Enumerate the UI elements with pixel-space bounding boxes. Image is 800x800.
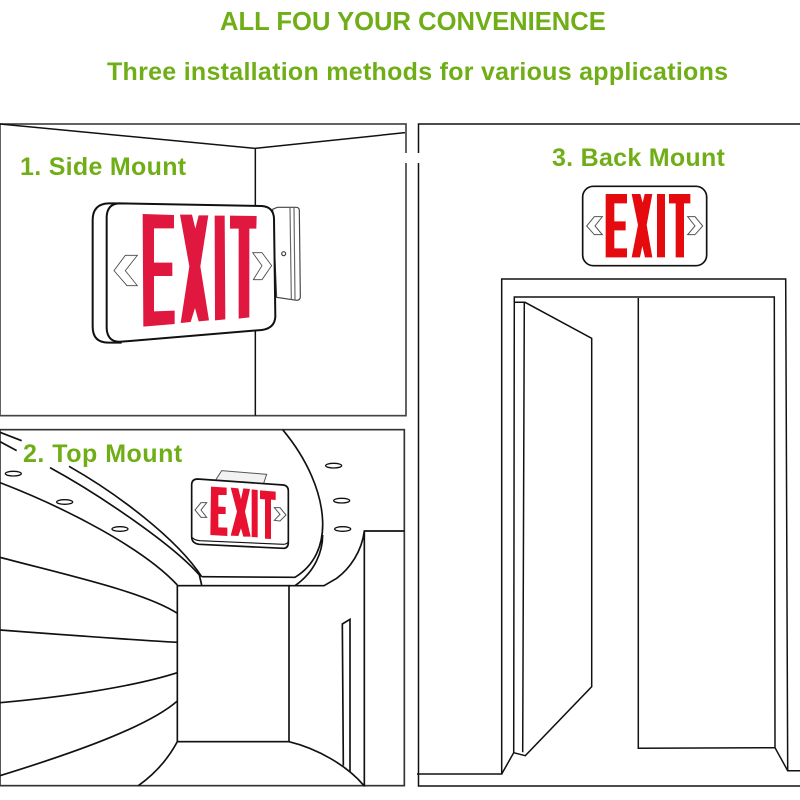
arrows side mount bbox=[114, 253, 272, 286]
sign: back mount bbox=[583, 186, 707, 266]
room corner lines bbox=[0, 124, 406, 416]
EXIT letters side mount bbox=[143, 214, 257, 327]
image seams bbox=[404, 153, 421, 163]
subtitle: Three installation methods for various applications bbox=[107, 58, 728, 86]
sign: top mount bbox=[192, 471, 288, 548]
wall bracket bbox=[273, 207, 300, 300]
sign housing side mount bbox=[93, 203, 122, 343]
title: ALL FOU YOUR CONVENIENCE bbox=[220, 8, 606, 36]
EXIT letters back mount bbox=[606, 194, 690, 257]
ceiling bracket bbox=[216, 471, 267, 484]
EXIT letters top mount bbox=[210, 487, 276, 539]
panel: top mount illustration bbox=[0, 430, 404, 787]
hallway lines bbox=[0, 430, 404, 787]
arrows top mount bbox=[195, 503, 286, 521]
panel: side mount illustration bbox=[0, 124, 406, 416]
heading: side mount: 1. Side Mount bbox=[20, 153, 186, 181]
sign face back mount bbox=[583, 186, 707, 266]
sign face side mount bbox=[107, 203, 275, 342]
right door bbox=[638, 298, 775, 748]
panel frame bbox=[418, 124, 800, 786]
heading: back mount: 3. Back Mount bbox=[552, 144, 725, 172]
sign body top mount bbox=[192, 479, 288, 548]
ceiling lights bbox=[5, 463, 351, 531]
panel: back mount illustration bbox=[417, 124, 800, 786]
left door leaf bbox=[514, 302, 592, 756]
door frame lines bbox=[417, 279, 800, 774]
arrows back mount bbox=[587, 217, 703, 235]
heading: top mount: 2. Top Mount bbox=[23, 440, 183, 468]
sign lower edge bbox=[192, 538, 288, 544]
